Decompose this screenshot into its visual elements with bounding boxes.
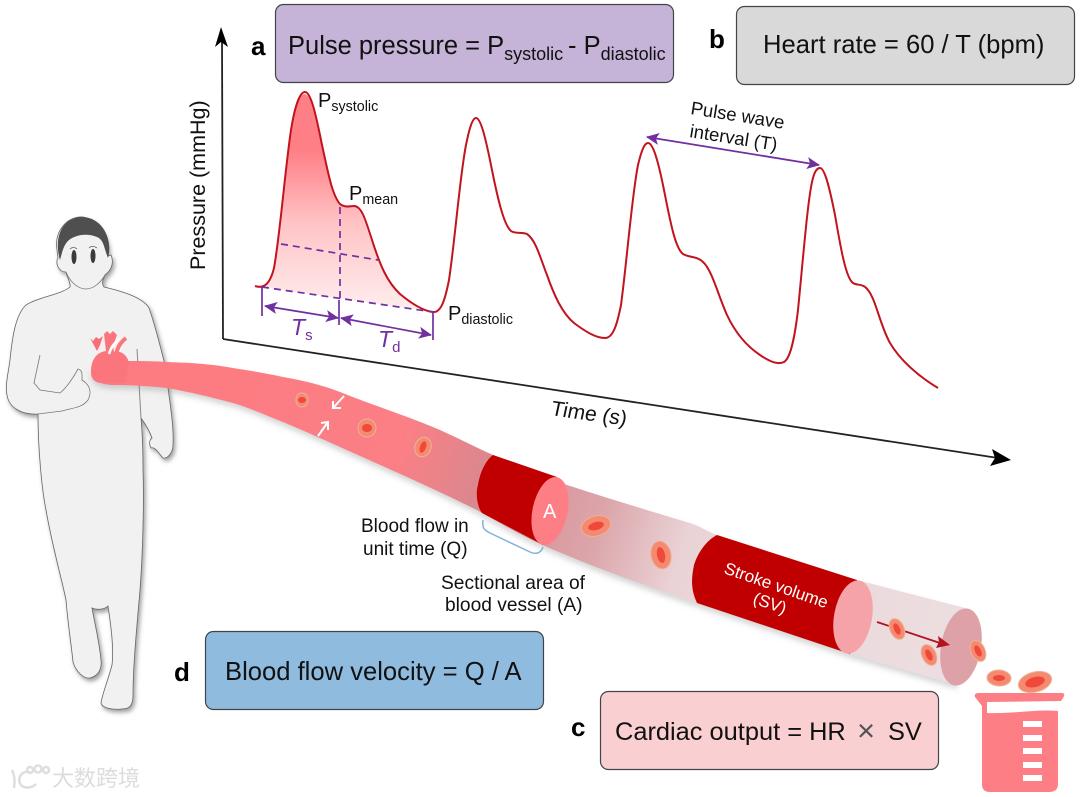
person hair bbox=[58, 217, 109, 260]
person arm detail bbox=[34, 355, 90, 414]
blood vessel tube bbox=[91, 361, 965, 685]
box a: pulse pressure: - P bbox=[568, 32, 601, 60]
y axis label: Pressure (mmHg) bbox=[186, 100, 210, 270]
P mean label: mean bbox=[362, 192, 398, 208]
cylinder stroke volume: Stroke volume bbox=[722, 559, 831, 612]
label A: blood vessel (A) bbox=[445, 595, 583, 616]
P diastolic label: P bbox=[448, 303, 461, 325]
box a: pulse pressure: diastolic bbox=[601, 44, 666, 64]
box a: pulse pressure bbox=[276, 4, 674, 82]
label d: d bbox=[174, 657, 190, 687]
box d: blood flow velocity: Blood flow velocity = Q / A bbox=[225, 658, 523, 686]
P mean label: P bbox=[349, 183, 362, 205]
label A bbox=[441, 573, 586, 616]
chart axes bbox=[215, 27, 1011, 466]
label Q: unit time (Q) bbox=[363, 539, 468, 560]
tube end bbox=[935, 605, 987, 689]
label a: a bbox=[251, 31, 266, 61]
cylinder stroke volume: (SV) bbox=[751, 589, 789, 618]
time interval brackets bbox=[262, 287, 433, 340]
label A: Sectional area of bbox=[441, 573, 586, 594]
watermark bbox=[12, 766, 140, 791]
label b: b bbox=[709, 24, 725, 54]
pulse wave interval: Pulse wave bbox=[689, 97, 786, 133]
box b: heart rate: Heart rate = 60 / T (bpm) bbox=[763, 31, 1044, 59]
box b: heart rate bbox=[736, 6, 1074, 84]
shaded first pulse bbox=[262, 94, 433, 312]
Ts label: s bbox=[305, 327, 313, 344]
cylinder A bbox=[477, 455, 574, 548]
red blood cells bbox=[296, 393, 1054, 696]
person silhouette bbox=[6, 217, 173, 709]
Td label: d bbox=[392, 339, 400, 356]
heart bbox=[90, 331, 129, 383]
dashed reference lines bbox=[262, 207, 433, 312]
front cells bbox=[886, 616, 989, 668]
flow arrow bbox=[877, 622, 950, 648]
Td label: T bbox=[378, 326, 392, 352]
x axis label: Time (s) bbox=[549, 397, 629, 430]
label Q bbox=[361, 516, 469, 560]
box a: pulse pressure: systolic bbox=[504, 44, 563, 64]
watermark: 大数跨境 bbox=[52, 766, 140, 791]
box c: cardiac output: × bbox=[857, 713, 875, 748]
box d: blood flow velocity bbox=[206, 632, 544, 710]
P systolic label: P bbox=[318, 90, 331, 112]
P diastolic label: diastolic bbox=[461, 312, 513, 328]
pulse wave interval: interval (T) bbox=[688, 120, 779, 155]
box a: pulse pressure: Pulse pressure = P bbox=[288, 32, 504, 60]
box c: cardiac output: Cardiac output = HR bbox=[615, 718, 846, 746]
bracket under cylinder bbox=[483, 520, 543, 553]
beaker bbox=[975, 693, 1064, 792]
cylinder A: A bbox=[543, 501, 557, 523]
person eyes bbox=[70, 246, 97, 264]
label Q: Blood flow in bbox=[361, 516, 469, 537]
pulse waveform line bbox=[255, 92, 938, 388]
chart: pressure waveform bbox=[186, 27, 1011, 466]
person chin line bbox=[66, 272, 105, 289]
cylinder stroke volume bbox=[692, 535, 878, 657]
box c: cardiac output bbox=[600, 692, 938, 770]
box c: cardiac output: SV bbox=[888, 718, 922, 746]
P systolic label: systolic bbox=[331, 99, 378, 115]
label c: c bbox=[571, 712, 585, 742]
pulse wave interval bbox=[647, 97, 819, 165]
Ts label: T bbox=[291, 314, 305, 340]
vessel diameter arrows bbox=[318, 396, 344, 436]
